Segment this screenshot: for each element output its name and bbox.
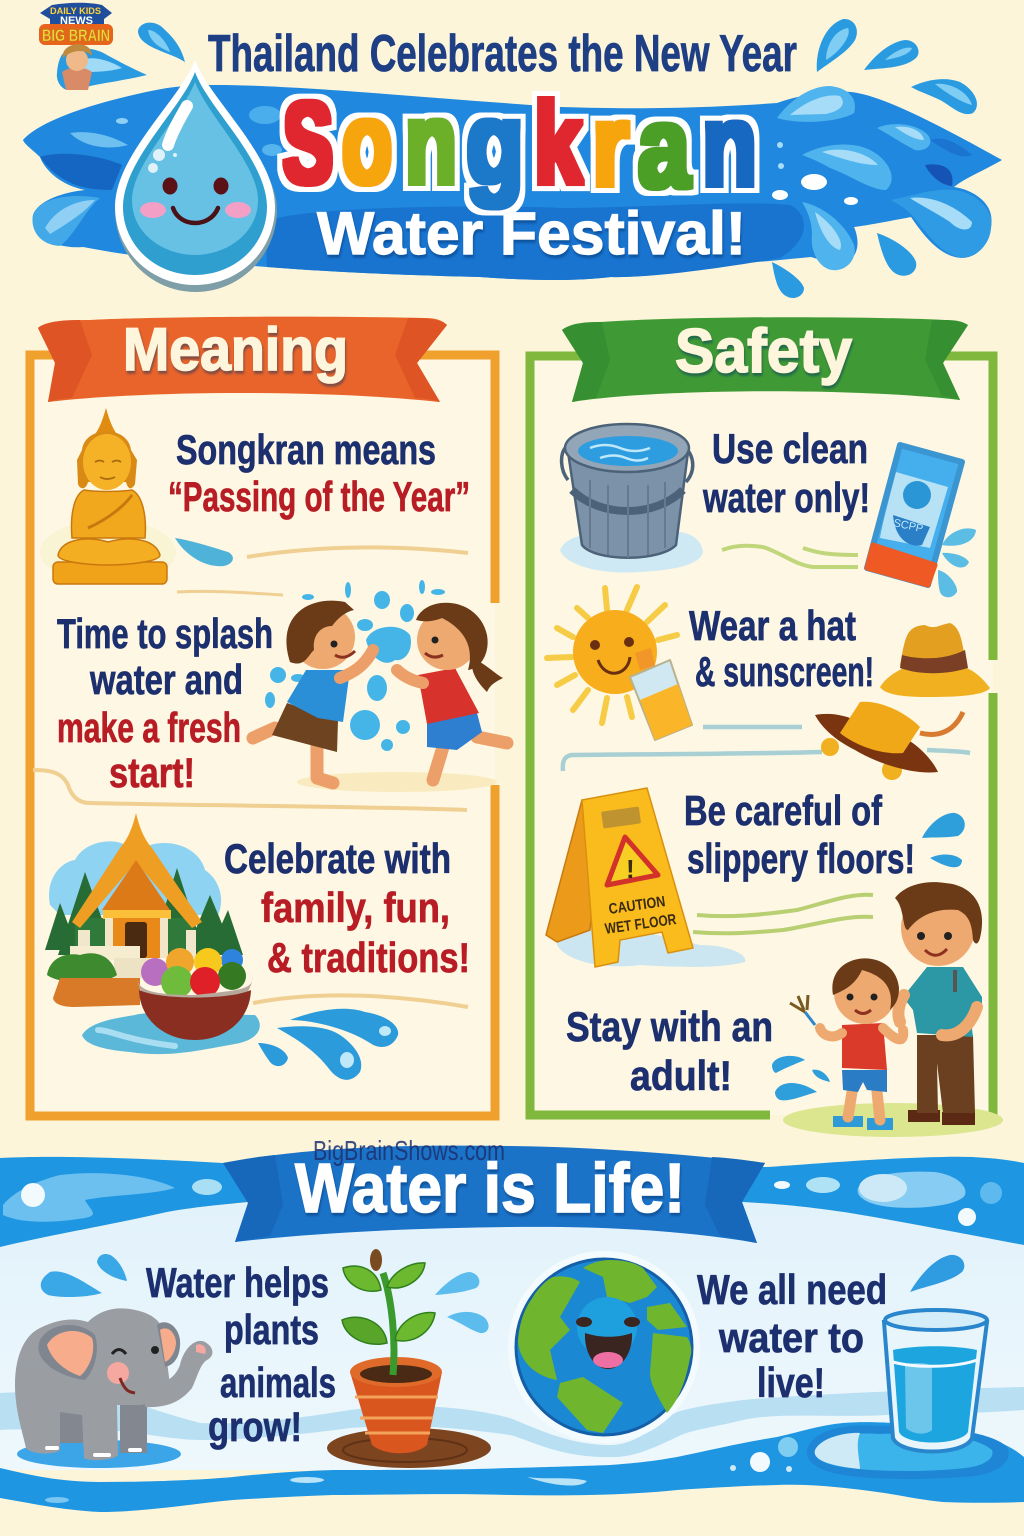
decorative splash and lines: safety row three	[693, 813, 965, 933]
heading: Songkran	[283, 78, 757, 212]
section: Water is Life	[0, 1135, 1024, 1512]
icon: sunscreen bottle	[867, 445, 976, 597]
text: We all need: We all need	[697, 1266, 887, 1313]
decorative lines: safety row one	[722, 546, 858, 567]
text: water only!: water only!	[702, 474, 870, 521]
text: & sunscreen!: & sunscreen!	[695, 648, 874, 695]
text: adult!: adult!	[630, 1052, 732, 1099]
banner: Meaning	[38, 316, 447, 402]
text: & traditions!: & traditions!	[267, 934, 470, 981]
decorative splash: temple row	[253, 995, 468, 1080]
panel frame: safety	[530, 356, 993, 1118]
text: Stay with an: Stay with an	[566, 1003, 773, 1050]
icon: smiling sun	[547, 587, 677, 723]
illustration: potted seedling	[327, 1249, 491, 1468]
text: Celebrate with: Celebrate with	[224, 835, 451, 882]
banner: Water is Life: Water is Life!	[295, 1149, 685, 1227]
text: family, fun,: family, fun,	[261, 884, 450, 931]
text: Time to splash: Time to splash	[57, 610, 273, 657]
text: Water helps: Water helps	[146, 1259, 329, 1306]
banner: Safety: Safety	[675, 317, 852, 386]
subtitle: Water Festival!: Water Festival!	[317, 200, 746, 267]
droplets: plant splash	[435, 1272, 489, 1333]
text: Wear a hat: Wear a hat	[689, 602, 856, 649]
illustration: child with adult	[772, 882, 1003, 1137]
text: make a fresh: make a fresh	[57, 704, 241, 751]
heading: Songkran: n	[702, 80, 757, 210]
text: Use clean: Use clean	[712, 425, 868, 472]
panel: Meaning	[30, 316, 507, 1116]
header splash droplets	[138, 19, 977, 298]
banner: Meaning: Meaning	[123, 316, 348, 383]
heading: Songkran: r	[592, 80, 629, 210]
logo: Daily Kids News Big Brain: NEWS	[60, 15, 93, 27]
illustration: glass of water on puddle	[807, 1310, 1009, 1479]
text: animals: animals	[220, 1359, 336, 1406]
text: live!: live!	[757, 1359, 825, 1406]
decorative divider: meaning row two	[33, 770, 467, 810]
text: Songkran means: Songkran means	[176, 426, 436, 473]
icon: caution wet floor sign	[546, 788, 745, 967]
text: Passing of the Year: “Passing of the Year”	[168, 473, 470, 520]
illustration: elephant	[15, 1308, 212, 1468]
text: grow!: grow!	[208, 1403, 302, 1450]
heading: Songkran: g	[466, 78, 524, 208]
header water banner	[23, 85, 1002, 280]
heading: Songkran: n	[405, 78, 457, 208]
illustration: smiling Earth	[508, 1251, 700, 1443]
illustration: children splashing water	[253, 580, 507, 792]
title: Thailand Celebrates the New Year: Thailand Celebrates the New Year	[208, 25, 797, 83]
icon: glass of juice	[630, 648, 692, 740]
heading: Songkran: o	[342, 78, 392, 208]
icon: brown hat and pipe	[563, 702, 970, 780]
text: plants: plants	[224, 1306, 319, 1353]
panel: Safety	[530, 317, 1003, 1137]
heading: Songkran: k	[534, 78, 582, 208]
logo: Daily Kids News Big Brain: BIG BRAIN	[42, 26, 110, 45]
text: water and: water and	[89, 656, 243, 703]
text: Be careful of: Be careful of	[684, 787, 883, 834]
text: slippery floors!: slippery floors!	[687, 835, 915, 882]
icon: caution wet floor sign: WET FLOOR	[604, 911, 678, 938]
water background bands	[0, 1157, 1024, 1512]
banner: Safety	[562, 317, 968, 402]
heading: Songkran: a	[638, 82, 691, 212]
banner: Water is Life	[223, 1135, 765, 1243]
text: start!: start!	[109, 749, 195, 796]
text: water to: water to	[718, 1314, 864, 1361]
panel frame: meaning	[30, 355, 495, 1116]
watermark: BigBrainShows.com: BigBrainShows.com	[313, 1135, 505, 1166]
icon: yellow sun hat	[880, 623, 990, 697]
logo: Daily Kids News Big Brain	[39, 3, 147, 90]
illustration: bowl of water and colorful offerings	[82, 948, 260, 1054]
icon: caution wet floor sign: !	[626, 854, 635, 884]
illustration: Thai temple	[45, 813, 243, 1007]
icon: sunscreen bottle: SCPP	[892, 517, 924, 535]
heading: Songkran: S	[283, 78, 333, 208]
droplets: left side	[41, 1254, 127, 1297]
icon: caution wet floor sign: CAUTION	[608, 893, 666, 918]
logo: Daily Kids News Big Brain: DAILY KIDS	[50, 6, 101, 16]
decorative splash: meaning row one	[175, 538, 468, 595]
icon: bucket of clean water	[560, 424, 703, 573]
icon: golden Buddha	[40, 408, 176, 584]
mascot: smiling water drop	[115, 60, 277, 292]
droplet: glass splash	[910, 1255, 964, 1292]
